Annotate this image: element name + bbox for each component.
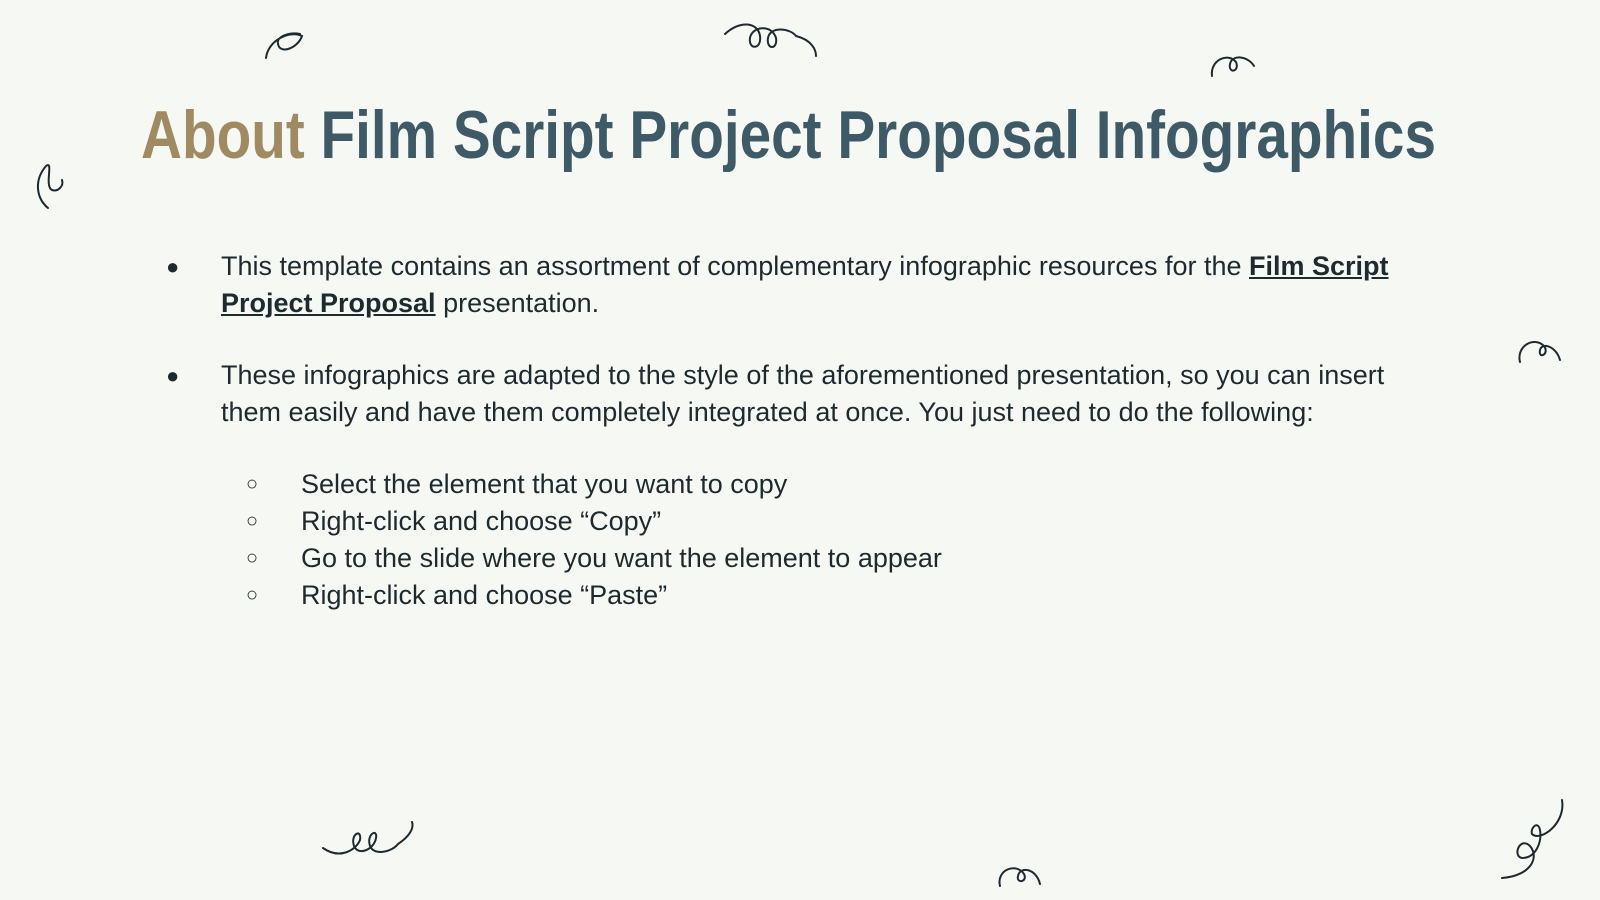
bullet 2: ● <box>166 363 179 388</box>
bullet 1: Project Proposal presentation. <box>221 288 599 318</box>
sub-bullet list: ○ <box>246 584 258 606</box>
bullet 1: This template contains an assortment of complementary infographic resources for the Film Script <box>221 251 1389 281</box>
text block: bullets <box>166 251 1389 610</box>
sub-bullet list: ○ <box>246 473 258 495</box>
bullet 2: These infographics are adapted to the style of the aforementioned presentation, so you can insert <box>221 360 1384 390</box>
bullet 1: ● <box>166 254 179 279</box>
bullet 2: them easily and have them completely integrated at once. You just need to do the following: <box>221 397 1314 427</box>
sub-bullet list <box>246 469 942 610</box>
sub-bullet list: Right-click and choose “Paste” <box>301 580 667 610</box>
sub-bullet list: Go to the slide where you want the element to appear <box>301 543 942 573</box>
bullet 1 <box>166 251 1389 318</box>
sub-bullet list: Select the element that you want to copy <box>301 469 787 499</box>
bullet 2 <box>166 360 1384 427</box>
sub-bullet list: Right-click and choose “Copy” <box>301 506 661 536</box>
sub-bullet list: ○ <box>246 547 258 569</box>
sub-bullet list: ○ <box>246 510 258 532</box>
